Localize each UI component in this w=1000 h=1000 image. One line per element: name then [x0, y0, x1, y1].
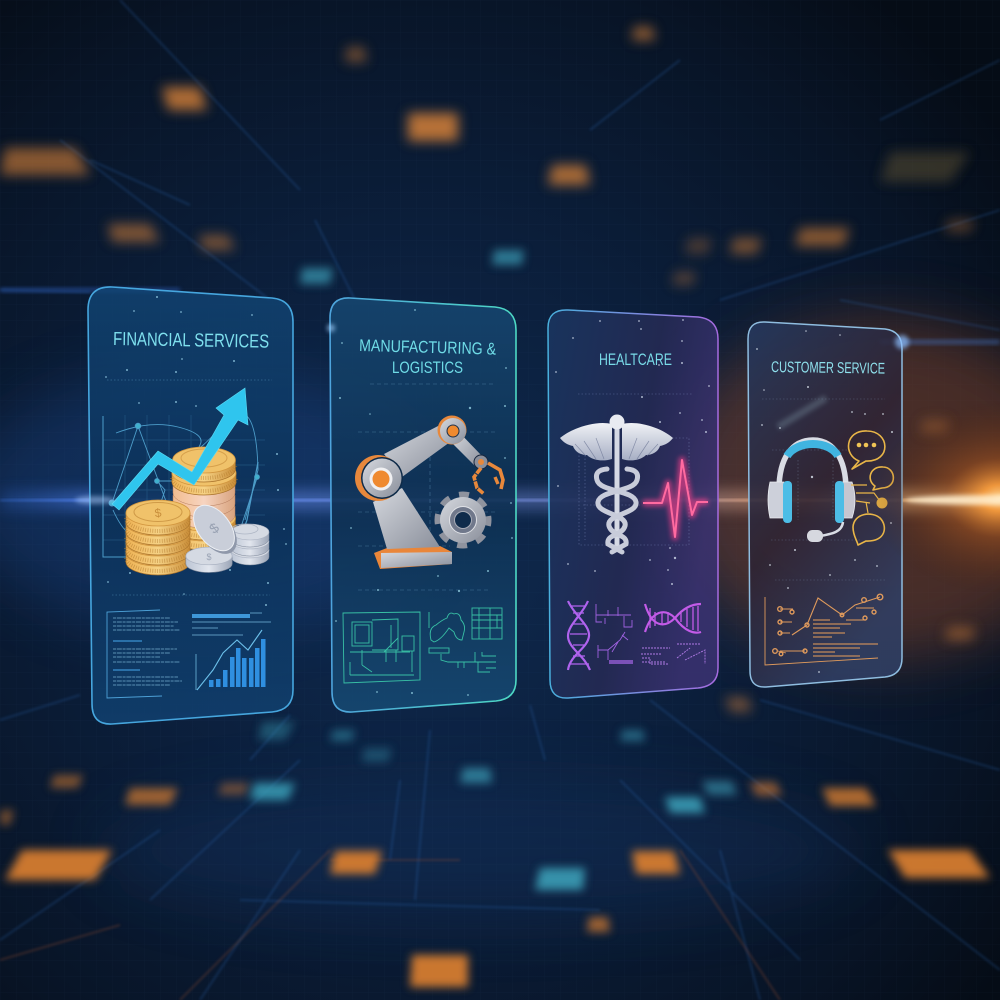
- particle dots: [756, 330, 893, 673]
- panel: healthcare: [548, 310, 718, 698]
- heading: healthcare: HEALTCARE: [599, 350, 672, 369]
- icon: front gold coin stack: [126, 500, 190, 575]
- icon: silver coin stack: [231, 524, 269, 565]
- panel: financial services: [88, 287, 293, 724]
- particle dots: [335, 309, 513, 696]
- particle dots: [105, 296, 287, 606]
- molecular diagrams: [596, 604, 705, 664]
- icon: heartbeat line: [643, 460, 708, 537]
- background schematic: [358, 384, 495, 590]
- background line chart: [103, 413, 265, 557]
- arrow: growth trend: [112, 388, 248, 510]
- icon: headset: [768, 440, 855, 542]
- card body: [330, 298, 516, 712]
- heading: manufacturing and logistics: MANUFACTURING &: [359, 336, 497, 359]
- panel: customer service: [748, 322, 902, 687]
- icon: back gold coin stack: [172, 447, 236, 550]
- card body: [88, 287, 293, 724]
- horizontal light flare: [0, 288, 1000, 510]
- icon: chat bubbles: [849, 431, 893, 545]
- dotted dividers: [107, 380, 272, 595]
- icon: flat silver coin: [186, 547, 232, 572]
- icon: robot arm: [355, 416, 503, 569]
- card body: [548, 310, 718, 698]
- card body: [748, 322, 902, 687]
- icon: vertical dna: [568, 601, 590, 670]
- blurred orange data tiles: near: [0, 775, 990, 987]
- text report panel: [107, 610, 182, 698]
- icon: tilted silver coin: [185, 498, 245, 561]
- circuit schematic left: [343, 612, 420, 683]
- lens glow: right: [75, 324, 1000, 593]
- heading: financial services: FINANCIAL SERVICES: [113, 329, 269, 353]
- heading: manufacturing and logistics: [359, 336, 497, 377]
- heading: manufacturing and logistics: LOGISTICS: [392, 358, 463, 377]
- blurred orange data tiles: far: [0, 27, 975, 712]
- panel: manufacturing and logistics: [330, 298, 516, 712]
- blurred teal data tiles: [250, 250, 737, 890]
- dotted grid: [762, 399, 885, 580]
- particle dots: [555, 319, 710, 585]
- icon: horizontal dna: [645, 604, 701, 633]
- icon: gear: [438, 496, 488, 544]
- dotted grid: [578, 394, 692, 545]
- mini bar chart: [192, 613, 271, 690]
- light streak: [778, 398, 826, 427]
- icon: tilted silver coin: $: [206, 519, 222, 537]
- icon: flat silver coin: $: [206, 552, 212, 562]
- icon: front gold coin stack: $: [154, 506, 163, 520]
- icon: caduceus: [560, 414, 673, 552]
- orange data chart: [765, 594, 883, 665]
- circuit schematic right: [429, 608, 502, 672]
- heading: customer service: CUSTOMER SERVICE: [771, 359, 885, 378]
